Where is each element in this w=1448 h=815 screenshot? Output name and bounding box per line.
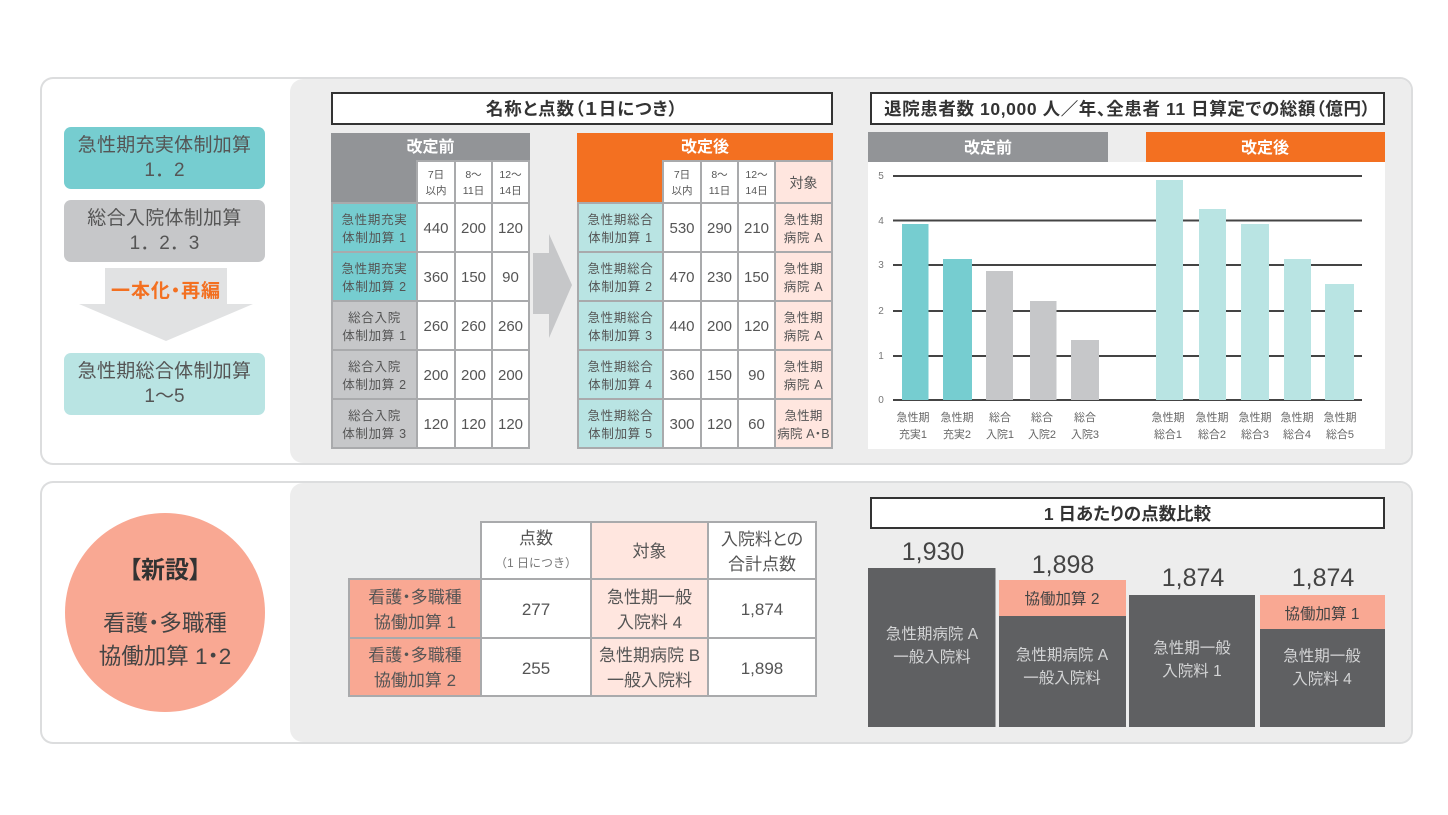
table: after revision: 急性期 [784, 212, 823, 226]
x axis labels: 総合4 [1283, 427, 1311, 441]
box: general hospitalization add-on [64, 200, 265, 262]
y axis labels: 2 [878, 306, 884, 317]
table: before revision: 体制加算 3 [342, 426, 407, 440]
x axis labels: 急性期 [896, 410, 930, 424]
bar: 1,898: 急性期病院 A [1016, 646, 1109, 664]
table: after revision: 改定後 [681, 139, 729, 156]
table: new add-on points: 協働加算 2 [374, 671, 456, 690]
table: before revision: 12～ [499, 169, 522, 181]
heading: names and points: 名称と点数（１日につき） [486, 99, 678, 119]
table: new add-on points: （1 日につき） [495, 556, 577, 570]
table: before revision: 8～ [465, 169, 482, 181]
arrow: before to after [533, 234, 572, 338]
table: after revision: 120 [744, 318, 769, 335]
table: after revision: 7日 [674, 169, 690, 181]
table: after revision: 病院 A [784, 280, 823, 294]
table: before revision: 360 [423, 269, 449, 286]
table: after revision: 200 [707, 318, 732, 335]
table: before revision: 総合入院 [348, 360, 401, 374]
x axis labels: 総合3 [1241, 427, 1269, 441]
bar: 1,874 with add-on: 協働加算 1 [1285, 604, 1359, 623]
panel background: grey detail area [290, 79, 1411, 463]
table: before revision: 260 [498, 318, 523, 335]
table: after revision: 11日 [709, 185, 730, 197]
table: new add-on points: 看護・多職種 [368, 588, 462, 606]
bar: 1,898 [999, 551, 1126, 727]
x axis labels: 入院1 [986, 428, 1014, 441]
table: before revision: 体制加算 2 [342, 378, 407, 392]
box: general hospitalization add-on: 総合入院体制加算 [87, 208, 242, 229]
table: before revision [331, 133, 530, 449]
table: before revision: 260 [423, 318, 449, 335]
x axis labels: 総合 [1074, 410, 1096, 424]
table: after revision: 体制加算 3 [588, 328, 653, 342]
table: new add-on points: 急性期一般 [607, 588, 692, 606]
circle: new add-on: 看護・多職種 [103, 611, 227, 636]
x axis labels: 充実2 [943, 428, 971, 441]
table: after revision: 210 [744, 220, 769, 237]
table: before revision: 体制加算 2 [342, 280, 407, 294]
box: acute comprehensive add-on [64, 353, 265, 415]
y axis labels: 4 [878, 216, 884, 227]
table: after revision: 急性期 [784, 310, 823, 324]
bar: 1,898: 1,898 [1032, 551, 1094, 579]
x axis labels: 急性期 [1196, 410, 1228, 424]
table: before revision: 260 [461, 318, 486, 335]
x axis labels: 急性期 [1280, 410, 1314, 424]
table: new add-on points: 277 [522, 600, 550, 619]
x axis labels: 総合2 [1198, 427, 1226, 441]
bar: 1,874 with add-on: 1,874 [1292, 564, 1354, 592]
bar: 1,874 with add-on: 急性期一般 [1283, 647, 1361, 665]
x axis labels: 充実1 [899, 428, 927, 441]
table: new add-on points [348, 521, 817, 697]
bar: 1,930 [868, 538, 996, 727]
table: before revision: 120 [423, 416, 449, 433]
panel background: grey detail area [290, 483, 1411, 742]
heading: daily points comparison: 1 日あたりの点数比較 [1044, 504, 1211, 524]
table: after revision: 急性期総合 [587, 212, 654, 226]
table: after revision: 14日 [745, 185, 768, 197]
table: before revision: 総合入院 [348, 310, 401, 324]
table: after revision: 8～ [711, 169, 728, 181]
table: after revision: 230 [707, 269, 732, 286]
panel: consolidation of add-on fees [40, 77, 1413, 465]
table: new add-on points: 急性期病院 B [599, 646, 700, 665]
table: after revision: 300 [669, 416, 695, 433]
table: before revision: 90 [502, 269, 519, 286]
table: after revision: 530 [669, 220, 695, 237]
header: after [1146, 132, 1385, 162]
table: after revision: 体制加算 5 [588, 426, 653, 440]
table: before revision: 120 [498, 220, 523, 237]
table: after revision: 440 [669, 318, 695, 335]
table: after revision: 150 [707, 367, 732, 384]
table: before revision: 14日 [499, 185, 522, 197]
bars: before [902, 224, 1099, 400]
table: after revision: 120 [707, 416, 732, 433]
table: new add-on points: 一般入院料 [607, 671, 692, 690]
table: after revision: 急性期総合 [587, 408, 654, 422]
table: after revision: 急性期 [784, 262, 823, 276]
table: before revision: 200 [423, 367, 449, 384]
x axis labels: 総合5 [1326, 427, 1354, 441]
y axis and grid [893, 176, 1362, 400]
table: before revision: 急性期充実 [341, 262, 408, 276]
x axis labels [896, 410, 1356, 441]
table: before revision: 体制加算 1 [342, 328, 407, 342]
table: before revision: 120 [461, 416, 486, 433]
table: before revision: 200 [461, 220, 486, 237]
x axis labels: 急性期 [1238, 410, 1272, 424]
heading: names and points [331, 92, 833, 125]
x axis labels: 総合 [989, 410, 1011, 424]
table: after revision: 60 [748, 416, 765, 433]
table: new add-on points: 合計点数 [728, 554, 796, 574]
x axis labels: 急性期 [1152, 410, 1184, 424]
heading: total amount [870, 92, 1385, 125]
box: acute comprehensive add-on: 急性期総合体制加算 [78, 361, 251, 382]
table: before revision: 体制加算 1 [342, 230, 407, 244]
bar chart: total amount before and after [868, 132, 1385, 449]
table: before revision: 150 [461, 269, 486, 286]
table: after revision: 病院 A [784, 378, 823, 392]
table: after revision: 急性期総合 [587, 262, 654, 276]
table: after revision: 470 [669, 269, 695, 286]
table: after revision: 290 [707, 220, 732, 237]
table: before revision: 200 [461, 367, 486, 384]
table: after revision: 対象 [790, 175, 818, 191]
box: acute care enhancement add-on: 1．2 [144, 160, 185, 181]
bar: 1,898: 一般入院料 [1023, 669, 1101, 687]
table: before revision: 改定前 [406, 139, 454, 156]
table: after revision: 急性期総合 [587, 360, 654, 374]
table: before revision: 急性期充実 [341, 212, 408, 226]
heading: total amount: 退院患者数 10,000 人／年、全患者 11 日算定での総額（億円） [884, 99, 1371, 119]
table: new add-on points: 看護・多職種 [368, 646, 462, 665]
table: before revision: 総合入院 [348, 408, 401, 422]
box: acute care enhancement add-on [64, 127, 265, 189]
y axis labels: 1 [878, 351, 884, 362]
table: after revision: 体制加算 4 [588, 378, 653, 392]
table: after revision: 以内 [672, 185, 692, 197]
table: after revision: 12～ [745, 169, 768, 181]
y axis labels [878, 171, 884, 406]
y axis labels: 0 [878, 395, 884, 406]
stacked bars: daily points comparison [868, 538, 1385, 727]
x axis labels: 総合1 [1154, 427, 1182, 441]
bar: 1,874: 1,874 [1162, 564, 1224, 592]
x axis labels: 急性期 [940, 410, 974, 424]
table: new add-on points: 1,874 [741, 600, 783, 619]
y axis labels: 5 [878, 171, 884, 182]
box: general hospitalization add-on: 1．2．3 [130, 233, 199, 254]
table: before revision: 120 [498, 416, 523, 433]
table: before revision: 200 [498, 367, 523, 384]
table: after revision: 急性期 [784, 408, 823, 422]
heading: daily points comparison [870, 497, 1385, 529]
circle: new add-on: 協働加算 1・2 [99, 644, 231, 669]
bar: 1,930: 一般入院料 [893, 648, 971, 666]
table: after revision: 体制加算 2 [588, 280, 653, 294]
table: new add-on points: 255 [522, 658, 550, 678]
table: new add-on points: 対象 [632, 542, 666, 561]
y axis labels: 3 [878, 260, 884, 271]
table: new add-on points: 入院料 4 [617, 612, 682, 632]
bar: 1,930: 1,930 [902, 538, 964, 566]
table: after revision: 病院 A・B [777, 426, 830, 440]
table: after revision: 360 [669, 367, 695, 384]
bar: 1,874: 急性期一般 [1153, 639, 1231, 657]
table: after revision [577, 133, 833, 449]
bar: 1,874 with add-on [1260, 564, 1385, 727]
circle: new add-on [65, 513, 265, 712]
x axis labels: 入院2 [1028, 428, 1056, 441]
x axis labels: 入院3 [1071, 428, 1099, 441]
bars: after [1156, 180, 1354, 400]
box: acute comprehensive add-on: 1～5 [144, 386, 185, 407]
table: after revision: 病院 A [784, 328, 823, 342]
table: before revision: 11日 [463, 185, 484, 197]
table: after revision: 急性期総合 [587, 310, 654, 324]
table: after revision: 病院 A [784, 230, 823, 244]
table: new add-on points: 点数 [519, 529, 553, 548]
bar: 1,874 [1129, 564, 1255, 727]
x axis labels: 急性期 [1324, 410, 1356, 424]
circle: new add-on: 【新設】 [129, 557, 201, 584]
x axis labels: 総合 [1031, 410, 1053, 424]
header: before [868, 132, 1108, 162]
arrow: consolidation and reorganization [80, 268, 252, 341]
table: after revision: 急性期 [784, 360, 823, 374]
panel: new collaboration add-on [40, 481, 1413, 744]
bar: 1,898: 協働加算 2 [1025, 589, 1099, 608]
box: acute care enhancement add-on: 急性期充実体制加算 [78, 135, 251, 156]
table: after revision: 90 [748, 367, 765, 384]
bar: 1,930: 急性期病院 A [886, 625, 979, 643]
table: new add-on points: 入院料との [721, 530, 803, 548]
table: after revision: 150 [744, 269, 769, 286]
table: new add-on points: 1,898 [741, 658, 783, 678]
header: after: 改定後 [1241, 138, 1289, 157]
header: before: 改定前 [964, 138, 1012, 157]
bar: 1,874: 入院料 1 [1162, 662, 1222, 680]
table: before revision: 7日 [428, 169, 444, 181]
table: before revision: 以内 [426, 185, 446, 197]
table: new add-on points: 協働加算 1 [374, 612, 456, 632]
table: after revision: 体制加算 1 [588, 230, 653, 244]
bar: 1,874 with add-on: 入院料 4 [1292, 670, 1352, 688]
table: before revision: 440 [423, 220, 449, 237]
arrow: consolidation and reorganization: 一本化・再編 [111, 280, 221, 302]
